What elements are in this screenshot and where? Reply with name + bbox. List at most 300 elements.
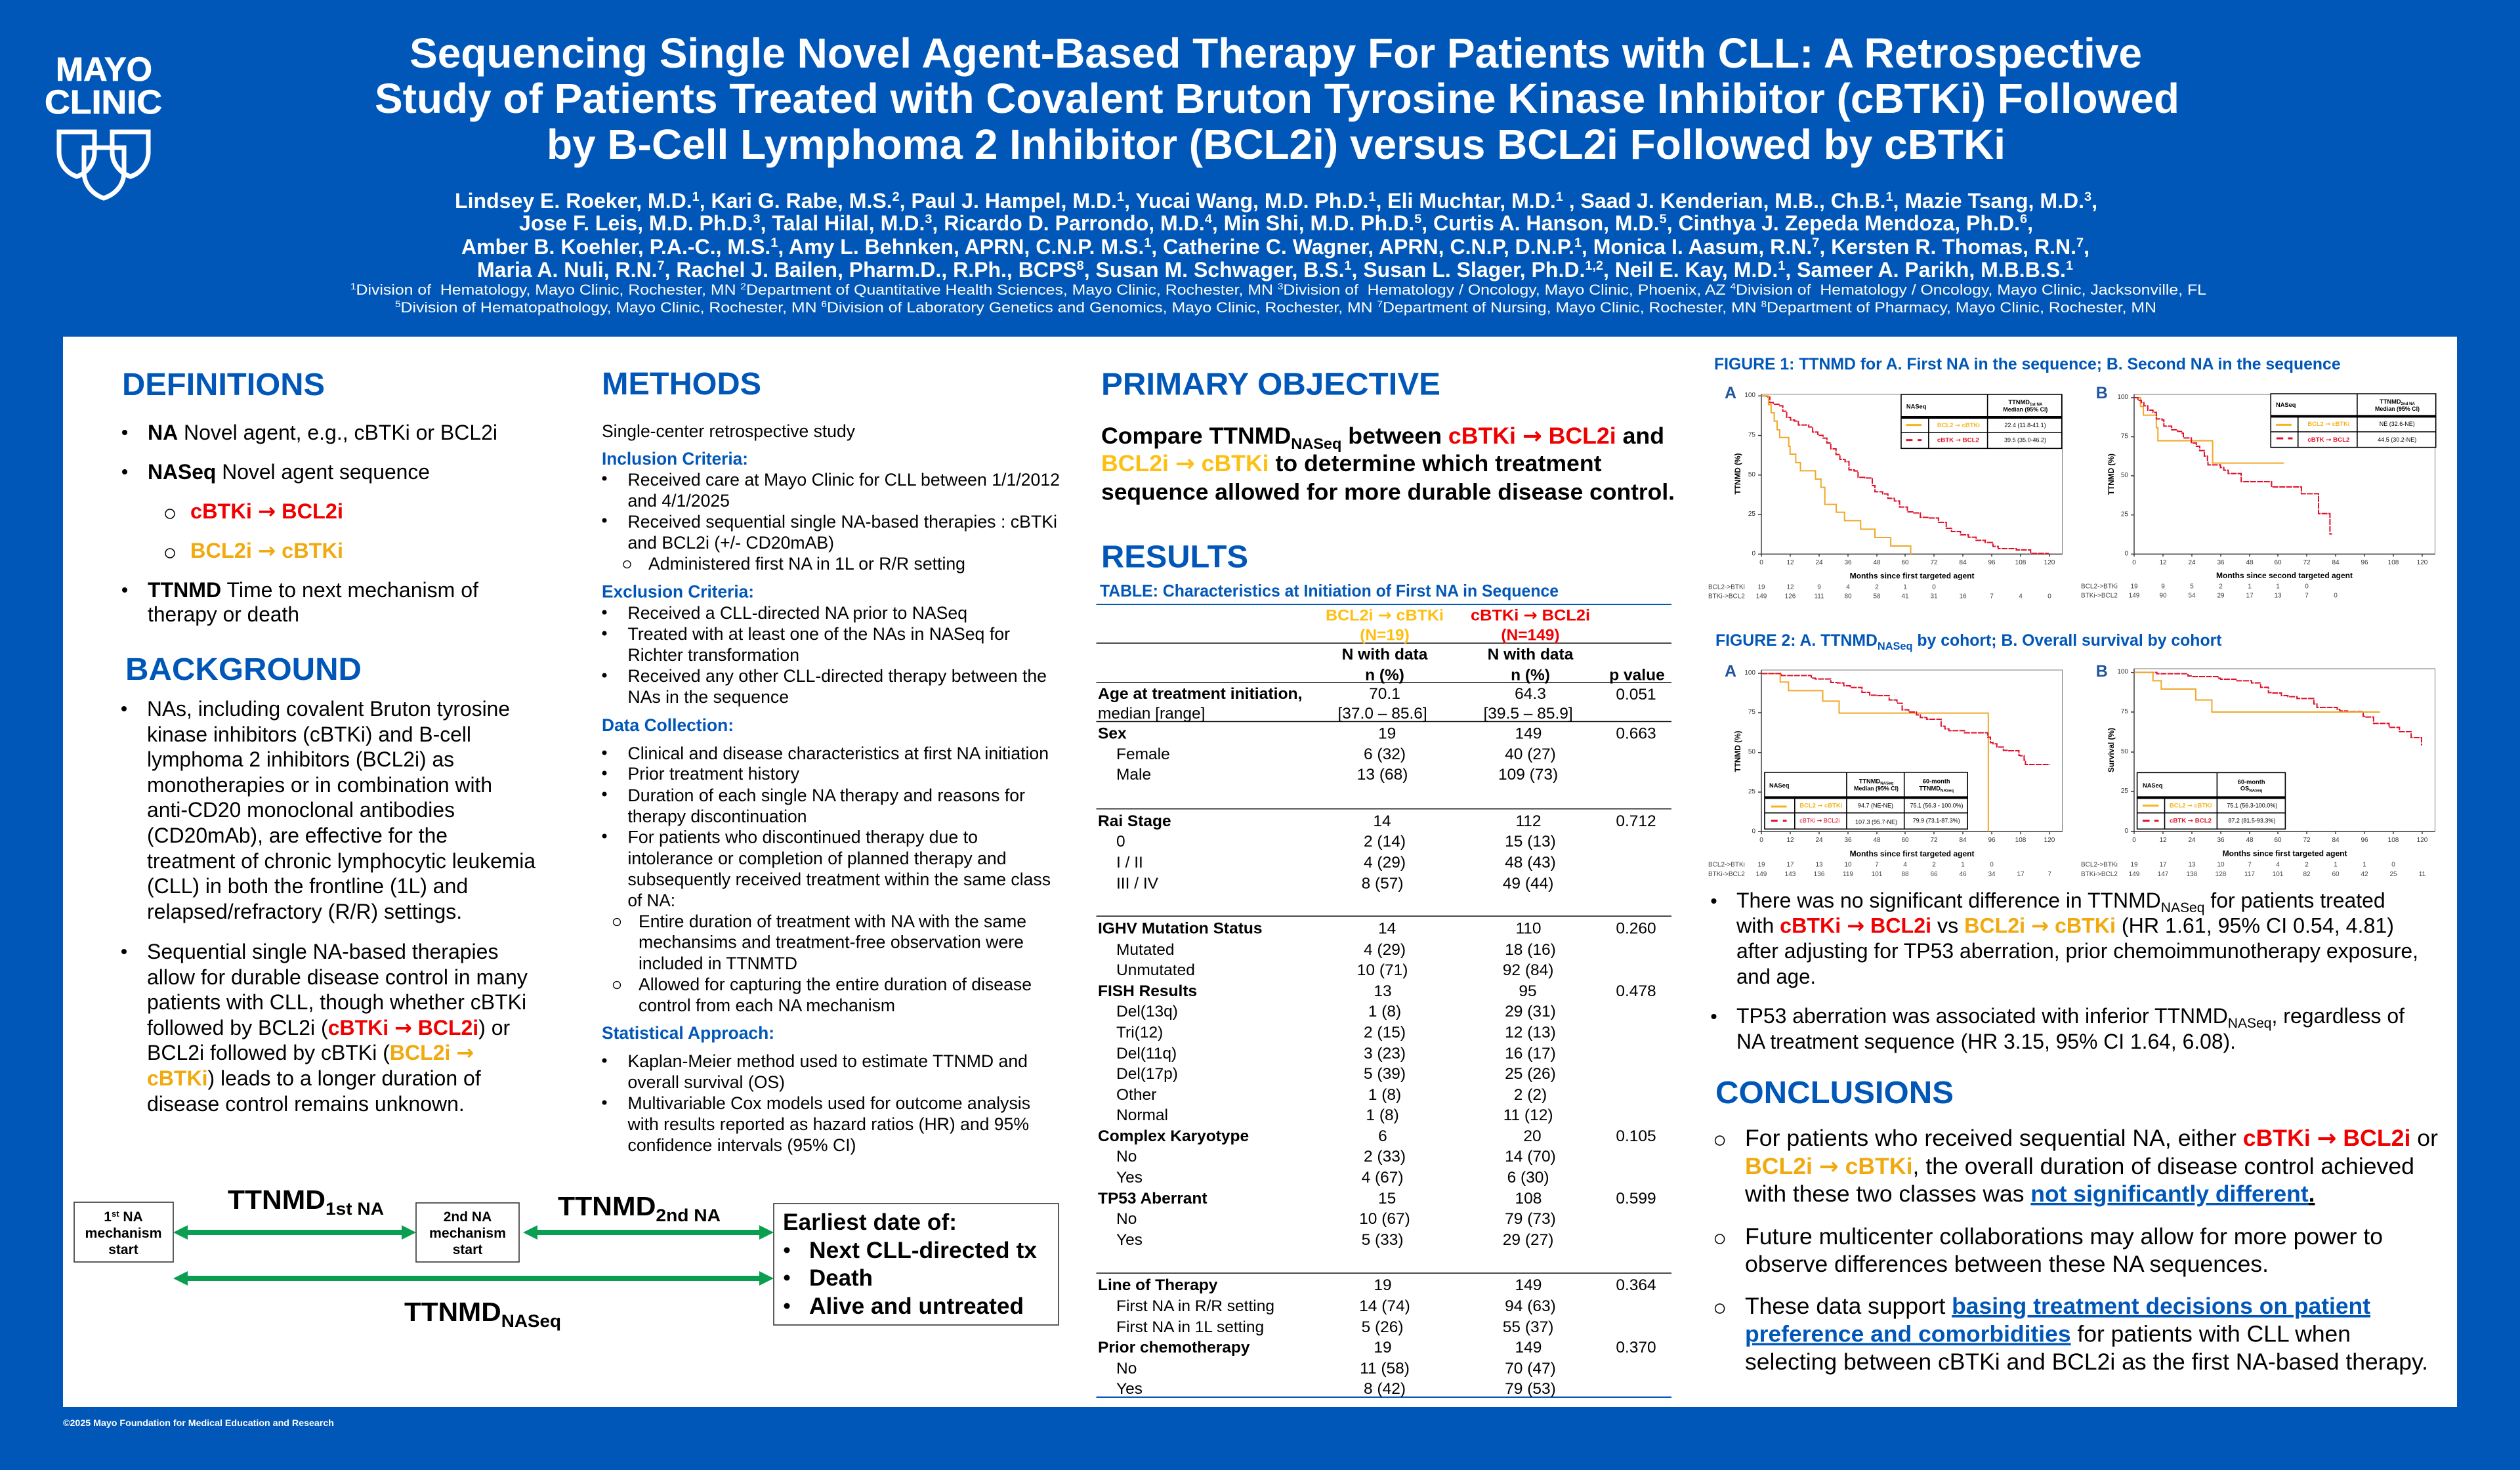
chart: figure 1B: 0 <box>2334 593 2338 600</box>
data collection: intolerance or completion of planned therapy and <box>627 849 1007 868</box>
chart: figure 1A: 31 <box>1930 593 1938 600</box>
panel: methods <box>602 367 1060 1155</box>
chart: figure 2A: 25 <box>1748 788 1755 795</box>
chart: figure 2A: TTNMD (%) <box>1733 730 1742 772</box>
chart: figure 2B: 100 <box>2117 669 2128 676</box>
chart: figure 1A: 84 <box>1959 559 1967 566</box>
column values: cBTKi to BCL2i: 149 <box>1515 1339 1542 1356</box>
inclusion criteria: Received sequential single NA-based therapies : cBTKi <box>627 512 1057 532</box>
background text: followed by BCL2i (cBTKi → BCL2i) or <box>147 1015 511 1040</box>
chart: figure 2B: BCL2 → cBTKi <box>2170 803 2212 810</box>
column values: BCL2i to cBTKi: 15 <box>1378 1190 1396 1208</box>
conclusions list: with these two classes was not significantly different. <box>1744 1181 2315 1207</box>
chart: figure 2B: cBTK → BCL2 <box>2170 818 2212 825</box>
column values: BCL2i to cBTKi: 8 (42) <box>1364 1380 1406 1398</box>
row labels: Mutated <box>1116 941 1175 959</box>
chart: figure 2A: 60-month <box>1923 778 1950 784</box>
chart: figure 1B: 7 <box>2305 593 2309 600</box>
background text: disease control remains unknown. <box>147 1092 465 1116</box>
chart: figure 2B: 19 <box>2130 862 2138 869</box>
chart: figure 2A: 66 <box>1930 871 1938 878</box>
column values: BCL2i to cBTKi: 19 <box>1374 1339 1392 1356</box>
chart: figure 2A: NASeq <box>1769 782 1790 789</box>
panel: background <box>121 652 536 1116</box>
chart: figure 1B: 0 <box>2124 550 2128 557</box>
statistical approach: overall survival (OS) <box>627 1072 785 1092</box>
chart: figure 2B: 50 <box>2121 748 2128 755</box>
chart: figure 1A: 96 <box>1988 559 1996 566</box>
row labels: Other <box>1116 1086 1156 1104</box>
affiliations: 5Division of Hematopathology, Mayo Clinic, Rochester, MN 6Division of Laboratory Genetics and Genomics, Mayo Clinic, Rochester, MN 7Department of Nursing, Mayo Clinic, Rochester, MN 8Department of Pharmacy, Mayo Clinic, Rochester, MN <box>395 299 2156 316</box>
chart: figure 2B: 128 <box>2216 871 2227 878</box>
chart: figure 1B: 84 <box>2332 559 2340 566</box>
chart: figure 1A: 120 <box>2044 559 2055 566</box>
inclusion criteria: Administered first NA in 1L or R/R setting <box>648 554 965 574</box>
definitions list: TTNMD Time to next mechanism of <box>148 578 478 602</box>
background text: treatment of chronic lymphocytic leukemia <box>147 849 536 873</box>
results text: and age. <box>1736 965 1816 988</box>
chart: figure 2A: 72 <box>1930 837 1938 844</box>
chart: figure 1A: 108 <box>2015 559 2026 566</box>
box: 2nd NA mechanism start: mechanism <box>429 1226 506 1241</box>
chart: figure 1A: 41 <box>1901 593 1909 600</box>
definitions list: cBTKi → BCL2i <box>190 499 343 524</box>
chart: figure 1A: NASeq <box>1906 404 1927 410</box>
logo: Mayo Clinic <box>45 51 162 198</box>
row labels: median [range] <box>1098 705 1205 723</box>
chart: figure 2B: 7 <box>2248 862 2252 869</box>
chart: figure 1A: 0 <box>1759 559 1763 566</box>
logo: Mayo Clinic: CLINIC <box>45 83 162 121</box>
row labels: I / II <box>1116 854 1143 872</box>
conclusions list: BCL2i → cBTKi, the overall duration of disease control achieved <box>1745 1154 2414 1180</box>
column values: BCL2i to cBTKi: 6 (32) <box>1364 746 1406 763</box>
chart: figure 2B: 72 <box>2303 837 2311 844</box>
chart: figure 2A: 119 <box>1843 871 1853 878</box>
results text <box>1712 889 2418 1053</box>
row labels: Sex <box>1098 724 1127 743</box>
background text: cBTKi) leads to a longer duration of <box>147 1066 481 1090</box>
data collection: Data Collection: <box>602 715 734 735</box>
table title: TABLE: Characteristics at Initiation of First NA in Sequence <box>1100 581 1559 600</box>
background text: (CD20mAb), are effective for the <box>147 824 448 847</box>
chart: figure 1A: 0 <box>1932 584 1936 591</box>
chart: figure 2A: 34 <box>1988 871 1996 878</box>
title: by B-Cell Lymphoma 2 Inhibitor (BCL2i) versus BCL2i Followed by cBTKi <box>547 121 2006 168</box>
chart: figure 2B: 120 <box>2417 837 2428 844</box>
chart: figure 1A: BTKi->BCL2 <box>1708 593 1745 600</box>
background text: Sequential single NA-based therapies <box>147 940 498 963</box>
conclusions list <box>1715 1125 2438 1375</box>
exclusion criteria: Exclusion Criteria: <box>602 581 754 601</box>
column values: BCL2i to cBTKi: 3 (23) <box>1364 1045 1406 1062</box>
chart: figure 2A: 0 <box>1990 862 1994 869</box>
chart: figure 1B: 2 <box>2219 583 2223 591</box>
column values: cBTKi to BCL2i: 92 (84) <box>1503 961 1553 979</box>
objective text: sequence allowed for more durable disease control. <box>1101 479 1675 505</box>
inclusion criteria: Received care at Mayo Clinic for CLL between 1/1/2012 <box>627 470 1060 490</box>
chart: figure 2A: 75 <box>1748 709 1755 716</box>
chart: figure 2B: 1 <box>2334 862 2338 869</box>
chart: figure 1A: 1 <box>1903 584 1907 591</box>
chart: figure 2A: 0 <box>1752 828 1755 835</box>
column values: p value: 0.599 <box>1616 1190 1656 1208</box>
row labels: Yes <box>1116 1231 1143 1249</box>
column values: cBTKi to BCL2i: 40 (27) <box>1505 746 1556 763</box>
exclusion criteria: Received a CLL-directed NA prior to NASeq <box>627 603 967 623</box>
row labels: III / IV <box>1116 875 1159 892</box>
data collection: Prior treatment history <box>627 764 800 784</box>
chart: figure 1B: 5 <box>2190 583 2194 591</box>
chart: figure 2B: 4 <box>2276 862 2280 869</box>
row labels: Yes <box>1116 1169 1143 1186</box>
row labels: Del(17p) <box>1116 1065 1178 1083</box>
chart: figure 1B: B <box>2096 384 2108 402</box>
column values: BCL2i to cBTKi: 4 (29) <box>1364 941 1406 959</box>
chart: figure 2B: 1 <box>2362 862 2366 869</box>
row labels: Unmutated <box>1116 961 1195 979</box>
inclusion criteria: and BCL2i (+/- CD20mAB) <box>627 533 834 553</box>
background text: (CLL) in both the frontline (1L) and <box>147 874 468 898</box>
column values: BCL2i to cBTKi: 4 (67) <box>1362 1169 1404 1186</box>
column values: BCL2i to cBTKi: 11 (58) <box>1360 1360 1410 1377</box>
chart: figure 1A: BCL2->BTKi <box>1708 584 1745 591</box>
inclusion criteria <box>602 449 1060 574</box>
column values: cBTKi to BCL2i: 29 (31) <box>1505 1003 1556 1020</box>
chart: figure 2B: 12 <box>2159 837 2167 844</box>
column values: cBTKi to BCL2i: 48 (43) <box>1505 854 1556 872</box>
column values: cBTKi to BCL2i: 12 (13) <box>1505 1024 1556 1041</box>
authors: Maria A. Nuli, R.N.7, Rachel J. Bailen, Pharm.D., R.Ph., BCPS8, Susan M. Schwager, B.S.1, Susan L. Slager, Ph.D.1,2, Neil E. Kay, M.D.1, Sameer A. Parikh, M.B.B.S.1 <box>477 258 2073 282</box>
background text: anti-CD20 monoclonal antibodies <box>147 798 455 822</box>
chart: figure 2B: B <box>2096 662 2108 681</box>
chart: figure 2B: 42 <box>2361 871 2368 878</box>
chart: figure 2A: 0 <box>1759 837 1763 844</box>
row labels: Normal <box>1116 1106 1168 1124</box>
row labels: Del(13q) <box>1116 1003 1178 1020</box>
logo: Mayo Clinic: MAYO <box>56 51 152 88</box>
column values: BCL2i to cBTKi: 5 (39) <box>1364 1065 1406 1083</box>
definitions list: BCL2i → cBTKi <box>190 538 343 563</box>
column values: p value: 0.478 <box>1616 982 1656 1000</box>
chart: figure 2A: 75.1 (56.3 - 100.0%) <box>1910 803 1964 809</box>
chart: figure 1A: 19 <box>1757 584 1765 591</box>
column values: cBTKi to BCL2i: 2 (2) <box>1514 1086 1547 1104</box>
figure 1 heading: FIGURE 1: TTNMD for A. First NA in the sequence; B. Second NA in the sequence <box>1714 355 2341 373</box>
chart: figure 1A: 12 <box>1786 559 1794 566</box>
table column headers: N with data <box>1342 646 1428 663</box>
data collection: subsequently received treatment within the same class <box>627 870 1051 889</box>
heading: methods: METHODS <box>602 367 761 402</box>
definitions list: NASeq Novel agent sequence <box>148 460 430 484</box>
column values: cBTKi to BCL2i: 6 (30) <box>1507 1169 1549 1186</box>
row labels: Tri(12) <box>1116 1024 1163 1041</box>
column values: BCL2i to cBTKi: 13 (68) <box>1357 766 1408 784</box>
methods intro: Single-center retrospective study <box>602 421 856 441</box>
table column headers: N with data <box>1488 646 1574 663</box>
chart: figure 2A: 13 <box>1815 862 1823 869</box>
conclusions list: observe differences between these NA sequences. <box>1745 1251 2269 1277</box>
chart: figure 2A: 79.9 (73.1-87.3%) <box>1913 818 1960 824</box>
chart: figure 2A: 36 <box>1844 837 1852 844</box>
results text: TP53 aberration was associated with inferior TTNMDNASeq, regardless of <box>1736 1004 2404 1031</box>
column values: p value: 0.663 <box>1616 724 1656 743</box>
panel: definitions <box>122 368 497 626</box>
conclusions list: For patients who received sequential NA, either cBTKi → BCL2i or <box>1745 1125 2438 1152</box>
authors: Jose F. Leis, M.D. Ph.D.3, Talal Hilal, M.D.3, Ricardo D. Parrondo, M.D.4, Min Shi, M.D. Ph.D.5, Curtis A. Hanson, M.D.5, Cinthya J. Zepeda Mendoza, Ph.D.6, <box>519 211 2033 235</box>
column values: cBTKi to BCL2i: 109 (73) <box>1498 766 1558 784</box>
chart: figure 2A: cBTKi → BCL2i <box>1799 818 1839 825</box>
table column headers: cBTKi → BCL2i <box>1471 606 1590 625</box>
chart: figure 2B: 25 <box>2389 871 2397 878</box>
chart: figure 1A: 75 <box>1748 432 1755 439</box>
column values: BCL2i to cBTKi: 10 (67) <box>1359 1210 1410 1228</box>
chart: figure 2A: 2 <box>1932 862 1936 869</box>
background text: patients with CLL, though whether cBTKi <box>147 990 526 1014</box>
chart: figure 1A: 58 <box>1873 593 1881 600</box>
box: earliest date of: Death <box>809 1265 873 1291</box>
row labels: FISH Results <box>1098 982 1197 1000</box>
row labels: No <box>1116 1148 1137 1166</box>
column values: BCL2i to cBTKi: 1 (8) <box>1366 1106 1399 1124</box>
column values: cBTKi to BCL2i: 149 <box>1515 724 1542 743</box>
chart: figure 2B: 147 <box>2158 871 2169 878</box>
chart: figure 2A: BTKi->BCL2 <box>1708 871 1745 878</box>
chart: figure 2B: 60-month <box>2238 778 2265 785</box>
column values: BCL2i to cBTKi: 19 <box>1378 724 1396 743</box>
column values: cBTKi to BCL2i: 110 <box>1515 920 1542 937</box>
results text: NA treatment sequence (HR 3.15, 95% CI 1.64, 6.08). <box>1736 1030 2236 1053</box>
column values: cBTKi to BCL2i: [39.5 – 85.9] <box>1483 705 1573 723</box>
row labels <box>1098 685 1302 1398</box>
chart: figure 2A: 149 <box>1756 871 1767 878</box>
chart: figure 1A: 50 <box>1748 471 1755 478</box>
chart: figure 1B: 50 <box>2121 472 2128 479</box>
box: 2nd NA mechanism start: start <box>453 1242 482 1257</box>
chart: figure 1B: 72 <box>2303 559 2311 566</box>
chart: figure 1B: 149 <box>2129 593 2140 600</box>
statistical approach: Statistical Approach: <box>602 1023 774 1043</box>
box: 2nd NA mechanism start: 2nd NA <box>444 1209 492 1225</box>
column values: cBTKi to BCL2i: 94 (63) <box>1505 1297 1556 1315</box>
chart: figure 2B <box>2081 662 2435 878</box>
exclusion criteria <box>602 581 1047 707</box>
background text: NAs, including covalent Bruton tyrosine <box>147 697 510 721</box>
chart: figure 2A: 46 <box>1959 871 1967 878</box>
chart: figure 2B: 149 <box>2129 871 2140 878</box>
row labels: No <box>1116 1210 1137 1228</box>
statistical approach: Multivariable Cox models used for outcome analysis <box>627 1093 1030 1113</box>
chart: figure 2A: BCL2->BTKi <box>1708 862 1745 869</box>
affiliations: 1Division of Hematology, Mayo Clinic, Rochester, MN 2Department of Quantitative Health Sciences, Mayo Clinic, Rochester, MN 3Division of Hematology / Oncology, Mayo Clinic, Phoenix, AZ 4Division of Hematology / Oncology, Mayo Clinic, Jacksonville, FL <box>350 281 2206 298</box>
column values: BCL2i to cBTKi: 14 <box>1373 812 1391 830</box>
results text: after adjusting for TP53 aberration, prior chemoimmunotherapy exposure, <box>1736 939 2418 963</box>
chart: figure 2A: BCL2 → cBTKi <box>1799 803 1842 810</box>
table column headers <box>1326 606 1665 684</box>
chart: figure 1A: 126 <box>1785 593 1796 600</box>
chart: figure 1A: 9 <box>1817 584 1821 591</box>
column values: p value: 0.712 <box>1616 812 1656 830</box>
chart: figure 1B: Median (95% CI) <box>2375 406 2420 412</box>
chart: figure 2A: 101 <box>1872 871 1883 878</box>
chart: figure 1B: 17 <box>2246 593 2254 600</box>
chart: figure 2B: BCL2->BTKi <box>2081 862 2118 869</box>
chart: figure 1B: 24 <box>2188 559 2196 566</box>
objective text <box>1101 423 1675 505</box>
row labels: No <box>1116 1360 1137 1377</box>
chart: figure 2A <box>1708 662 2062 878</box>
column values: cBTKi to BCL2i: 20 <box>1523 1127 1542 1145</box>
row labels: Prior chemotherapy <box>1098 1339 1250 1356</box>
chart: figure 2A: 100 <box>1744 669 1755 677</box>
data collection: Allowed for capturing the entire duration of disease <box>639 975 1032 994</box>
chart: figure 2A: 60 <box>1901 837 1909 844</box>
column values: cBTKi to BCL2i: 25 (26) <box>1505 1065 1556 1083</box>
chart: figure 1B: NASeq <box>2276 402 2296 408</box>
chart: figure 1A: 48 <box>1873 559 1881 566</box>
chart: figure 2A: 17 <box>2017 871 2025 878</box>
box: earliest date of: Next CLL-directed tx <box>809 1238 1038 1263</box>
chart: figure 1A: 0 <box>2048 593 2051 600</box>
statistical approach: Kaplan-Meier method used to estimate TTNMD and <box>627 1051 1028 1071</box>
row labels: First NA in R/R setting <box>1116 1297 1274 1315</box>
column values: cBTKi to BCL2i: 14 (70) <box>1505 1148 1556 1166</box>
table column headers: BCL2i → cBTKi <box>1326 606 1444 625</box>
chart: figure 2A: 1 <box>1961 862 1965 869</box>
chart: figure 1B: 29 <box>2217 593 2225 600</box>
chart: figure 1B: 0 <box>2305 583 2309 591</box>
chart: figure 2A: A <box>1725 662 1736 681</box>
row labels: IGHV Mutation Status <box>1098 920 1262 937</box>
chart: figure 1A: 39.5 (35.0-46.2) <box>2004 437 2046 444</box>
row labels: TP53 Aberrant <box>1098 1190 1208 1208</box>
conclusions list: Future multicenter collaborations may allow for more power to <box>1745 1224 2383 1250</box>
row labels: First NA in 1L setting <box>1116 1318 1264 1336</box>
chart: figure 1B: 90 <box>2159 593 2167 600</box>
chart: figure 1B: 96 <box>2361 559 2368 566</box>
chart: figure 2A: 136 <box>1814 871 1825 878</box>
column values: cBTKi to BCL2i: 15 (13) <box>1505 833 1556 850</box>
figure 2 heading: FIGURE 2: A. TTNMDNASeq by cohort; B. Overall survival by cohort <box>1715 631 2222 652</box>
background text: monotherapies or in combination with <box>147 773 492 797</box>
heading: results: RESULTS <box>1101 539 1248 575</box>
results text: There was no significant difference in TTNMDNASeq for patients treated <box>1736 889 2385 915</box>
column values: cBTKi to BCL2i: 55 (37) <box>1503 1318 1553 1336</box>
row labels: Del(11q) <box>1116 1045 1177 1062</box>
conclusions list: selecting between cBTKi and BCL2i as the first NA-based therapy. <box>1745 1349 2428 1375</box>
chart: figure 1A: 72 <box>1930 559 1938 566</box>
column values: cBTKi to BCL2i: 18 (16) <box>1505 941 1556 959</box>
chart: figure 2A: 88 <box>1901 871 1909 878</box>
row labels: Female <box>1116 746 1170 763</box>
chart: figure 2A: 7 <box>1875 862 1879 869</box>
title <box>375 30 2179 168</box>
title: Sequencing Single Novel Agent-Based Therapy For Patients with CLL: A Retrospective <box>410 30 2142 77</box>
column values: BCL2i to cBTKi: 2 (33) <box>1364 1148 1406 1166</box>
background text: lymphoma 2 inhibitors (BCL2i) as <box>147 747 454 771</box>
column values: cBTKi to BCL2i: 70 (47) <box>1505 1360 1556 1377</box>
column values: cBTKi to BCL2i: 112 <box>1515 812 1542 830</box>
chart: figure 1A: 25 <box>1748 511 1755 518</box>
column values: BCL2i to cBTKi: 1 (8) <box>1368 1086 1401 1104</box>
chart: figure 1A: 100 <box>1744 392 1755 399</box>
data collection: therapy discontinuation <box>627 807 807 826</box>
chart: figure 2B: 138 <box>2187 871 2198 878</box>
chart: figure 2B: 75.1 (56.3-100.0%) <box>2227 803 2277 809</box>
box: 1st NA mechanism start: mechanism <box>85 1226 161 1241</box>
chart: figure 2B: 108 <box>2388 837 2399 844</box>
background text: BCL2i followed by cBTKi (BCL2i → <box>147 1040 474 1065</box>
chart: figure 1B: TTNMD2nd NA <box>2380 398 2416 406</box>
chart: figure 1B: 108 <box>2388 559 2399 566</box>
table column headers: n (%) <box>1365 667 1404 684</box>
conclusions list: preference and comorbidities for patients with CLL when <box>1745 1322 2351 1347</box>
chart: figure 1B: BTKi->BCL2 <box>2081 593 2118 600</box>
column values: BCL2i to cBTKi: 5 (33) <box>1362 1231 1404 1249</box>
row labels: Yes <box>1116 1380 1143 1398</box>
arrow: whole sequence span <box>173 1271 774 1286</box>
objective text: BCL2i → cBTKi to determine which treatment <box>1101 450 1602 477</box>
column values: cBTKi to BCL2i: 149 <box>1515 1276 1542 1294</box>
panel: conclusions <box>1715 1076 2438 1375</box>
chart: figure 2B: 2 <box>2305 862 2309 869</box>
column values: cBTKi to BCL2i: 64.3 <box>1515 685 1546 703</box>
label: TTNMD 1st NA: TTNMD1st NA <box>228 1185 384 1219</box>
chart: figure 1B: 19 <box>2130 583 2138 591</box>
chart: figure 1A: 4 <box>1846 584 1850 591</box>
chart: figure 2A: Median (95% CI) <box>1854 786 1899 792</box>
box: earliest date of: Earliest date of: <box>783 1209 957 1235</box>
chart: figure 2B: 10 <box>2217 862 2225 869</box>
chart: figure 1A: 0 <box>1752 550 1755 557</box>
white content panel <box>63 337 2457 1407</box>
authors: Lindsey E. Roeker, M.D.1, Kari G. Rabe, M.S.2, Paul J. Hampel, M.D.1, Yucai Wang, M.D. Ph.D.1, Eli Muchtar, M.D.1 , Saad J. Kenderian, M.B., Ch.B.1, Mazie Tsang, M.D.3, <box>455 189 2097 213</box>
chart: figure 1B: NE (32.6-NE) <box>2380 421 2415 427</box>
label: TTNMD 2nd NA: TTNMD2nd NA <box>558 1191 721 1225</box>
chart: figure 1A: TTNMD (%) <box>1733 453 1742 495</box>
chart: figure 1A: 4 <box>2019 593 2023 600</box>
column values: BCL2i to cBTKi: 14 <box>1378 920 1396 937</box>
authors: Amber B. Koehler, P.A.-C., M.S.1, Amy L. Behnken, APRN, C.N.P. M.S.1, Catherine C. Wagner, APRN, C.N.P, D.N.P.1, Monica I. Aasum, R.N.7, Kersten R. Thomas, R.N.7, <box>461 235 2090 259</box>
chart: figure 2B: 25 <box>2121 788 2128 795</box>
column values: BCL2i to cBTKi: 13 <box>1374 982 1392 1000</box>
statistical approach <box>602 1023 1030 1155</box>
chart: figure 2A: 108 <box>2015 837 2026 844</box>
chart: figure 1B: 25 <box>2121 511 2128 518</box>
chart: figure 2B: 84 <box>2332 837 2340 844</box>
chart: figure 1B: 48 <box>2246 559 2254 566</box>
data collection: For patients who discontinued therapy due to <box>627 827 978 847</box>
column values: cBTKi to BCL2i: 16 (17) <box>1505 1045 1556 1062</box>
chart: figure 2B: 96 <box>2361 837 2368 844</box>
chart: figure 1B: 9 <box>2161 583 2165 591</box>
chart: figure 2B: 0 <box>2132 837 2136 844</box>
chart: figure 2B: 0 <box>2391 862 2395 869</box>
chart: figure 2B: 11 <box>2419 871 2426 878</box>
chart: figure 1B: 54 <box>2188 593 2196 600</box>
column values: BCL2i to cBTKi: 6 <box>1378 1127 1387 1145</box>
column values: BCL2i to cBTKi: 4 (29) <box>1364 854 1406 872</box>
chart: figure 2B: 60 <box>2274 837 2282 844</box>
definitions list <box>122 421 497 626</box>
chart: figure 1A: 24 <box>1815 559 1823 566</box>
chart: figure 1A: 149 <box>1756 593 1767 600</box>
exclusion criteria: Treated with at least one of the NAs in NASeq for <box>627 624 1010 644</box>
chart: figure 2A: 96 <box>1988 837 1996 844</box>
chart: figure 2A: 94.7 (NE-NE) <box>1858 803 1893 809</box>
chart: figure 2B: 117 <box>2244 871 2255 878</box>
diagram: TTNMD timeline <box>74 1185 1059 1331</box>
